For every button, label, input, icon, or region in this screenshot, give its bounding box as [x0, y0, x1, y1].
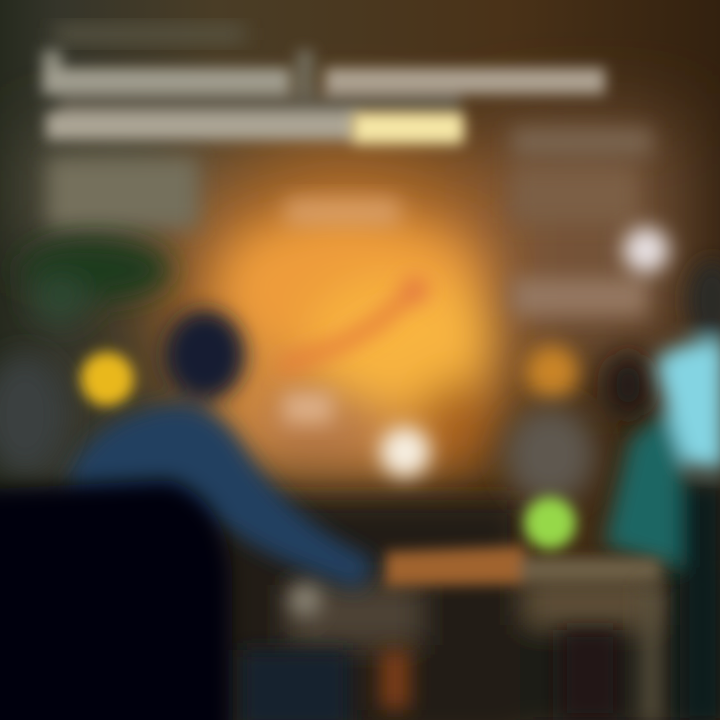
icon: orange dot	[525, 345, 579, 399]
title	[42, 50, 605, 140]
person at far left	[0, 355, 67, 475]
icon: white glow on screen	[380, 427, 430, 477]
person at left in blue	[70, 310, 375, 590]
highlighted title word	[352, 112, 464, 144]
small panel text on screen	[283, 392, 333, 424]
icon: yellow dot	[80, 352, 134, 406]
person at right in teal	[605, 260, 720, 720]
icon: green dot	[524, 497, 576, 549]
dark foreground chair	[0, 480, 232, 720]
lower dark desk background	[220, 500, 720, 720]
screen glow	[30, 120, 680, 470]
person at right middle	[505, 353, 650, 503]
eyebrow text	[55, 26, 245, 42]
chart heading	[285, 198, 400, 226]
chart trend line	[285, 276, 429, 365]
table	[385, 546, 660, 586]
title line 2	[46, 112, 356, 140]
title line 1	[42, 50, 605, 120]
icon: white dot	[623, 227, 669, 273]
lower desk details	[240, 584, 660, 720]
right text block lower	[512, 278, 647, 316]
right text block top	[512, 128, 652, 223]
central chart panel	[215, 210, 490, 470]
plant	[20, 240, 170, 325]
left paragraph	[48, 158, 198, 228]
